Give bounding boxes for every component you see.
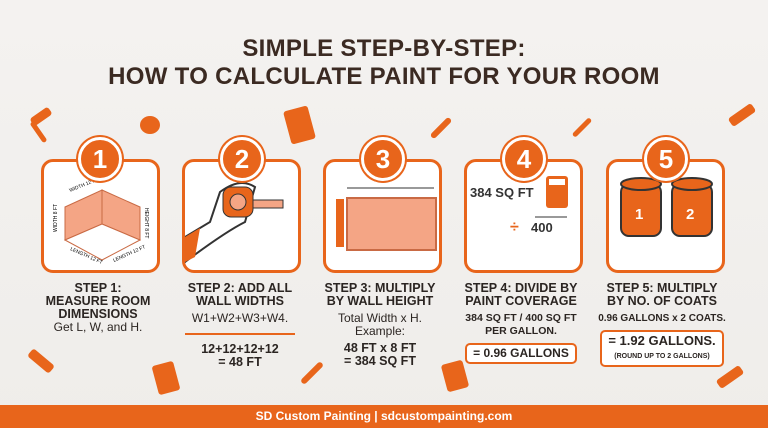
step 4 text: PAINT COVERAGE — [465, 294, 577, 308]
step 1 text — [46, 281, 150, 334]
step 5 text: (ROUND UP TO 2 GALLONS) — [614, 353, 710, 360]
step 5 text: 0.96 GALLONS x 2 COATS. — [598, 313, 726, 324]
step 5 text: BY NO. OF COATS — [607, 294, 717, 308]
card 1 — [41, 159, 160, 273]
step 4 text: STEP 4: DIVIDE BY — [464, 281, 578, 295]
card 4: 384 SQ FT — [470, 185, 534, 200]
card 5 — [606, 159, 725, 273]
step 2 text: WALL WIDTHS — [196, 294, 284, 308]
step 2 text: = 48 FT — [218, 355, 262, 369]
number 2: 2 — [235, 144, 249, 174]
number 3: 3 — [376, 144, 390, 174]
title — [108, 35, 660, 90]
card 4: ÷ — [510, 219, 519, 236]
decorative icons — [28, 104, 756, 395]
step 2 text: STEP 2: ADD ALL — [188, 281, 292, 295]
number 4: 4 — [517, 144, 531, 174]
card 3 — [323, 159, 442, 273]
step 2 text: W1+W2+W3+W4. — [192, 311, 288, 325]
card 4: 400 — [531, 220, 553, 235]
card 2 — [182, 159, 301, 273]
title: SIMPLE STEP-BY-STEP: — [242, 35, 526, 62]
number 1 — [78, 137, 122, 181]
step 2 text — [185, 281, 295, 369]
step 2 text: 12+12+12+12 — [201, 342, 279, 356]
step 1 text: MEASURE ROOM — [46, 294, 150, 308]
card 1: LENGTH 12 FT — [112, 244, 147, 264]
number 5: 5 — [659, 144, 673, 174]
card 1: LENGTH 12 FT — [69, 246, 103, 266]
card 5: 1 — [635, 206, 643, 223]
step 1 text: DIMENSIONS — [58, 307, 138, 321]
number 4 — [502, 137, 546, 181]
card 5: 2 — [686, 206, 694, 223]
step 3 text: STEP 3: MULTIPLY — [325, 281, 435, 295]
step 3 text: BY WALL HEIGHT — [327, 294, 433, 308]
step 1 text: Get L, W, and H. — [54, 320, 142, 334]
number 3 — [361, 137, 405, 181]
step 3 text — [324, 281, 436, 368]
card 1: HEIGHT 8 FT — [143, 208, 149, 238]
step 3 text: 48 FT x 8 FT — [344, 341, 416, 355]
footer: SD Custom Painting | sdcustompainting.com — [256, 409, 512, 423]
step 3 text: Example: — [355, 324, 405, 338]
step 4 text — [464, 281, 578, 364]
footer — [0, 405, 768, 428]
number 5 — [644, 137, 688, 181]
step 1 text: STEP 1: — [74, 281, 122, 295]
step 5 text: STEP 5: MULTIPLY — [607, 281, 717, 295]
step 5 text: = 1.92 GALLONS. — [608, 333, 716, 348]
step 4 text: 384 SQ FT / 400 SQ FT — [465, 312, 577, 324]
step 4 text: PER GALLON. — [485, 325, 557, 337]
card 1: WIDTH 12 FT — [69, 177, 99, 194]
step 5 text — [598, 281, 726, 367]
step 4 text: = 0.96 GALLONS — [473, 346, 569, 360]
step 3 text: Total Width x H. — [338, 311, 422, 325]
title: HOW TO CALCULATE PAINT FOR YOUR ROOM — [108, 63, 660, 90]
number 2 — [220, 137, 264, 181]
step 3 text: = 384 SQ FT — [344, 354, 416, 368]
card 1: WIDTH 8 FT — [53, 204, 59, 232]
number 1: 1 — [93, 144, 107, 174]
card 4 — [464, 159, 583, 273]
